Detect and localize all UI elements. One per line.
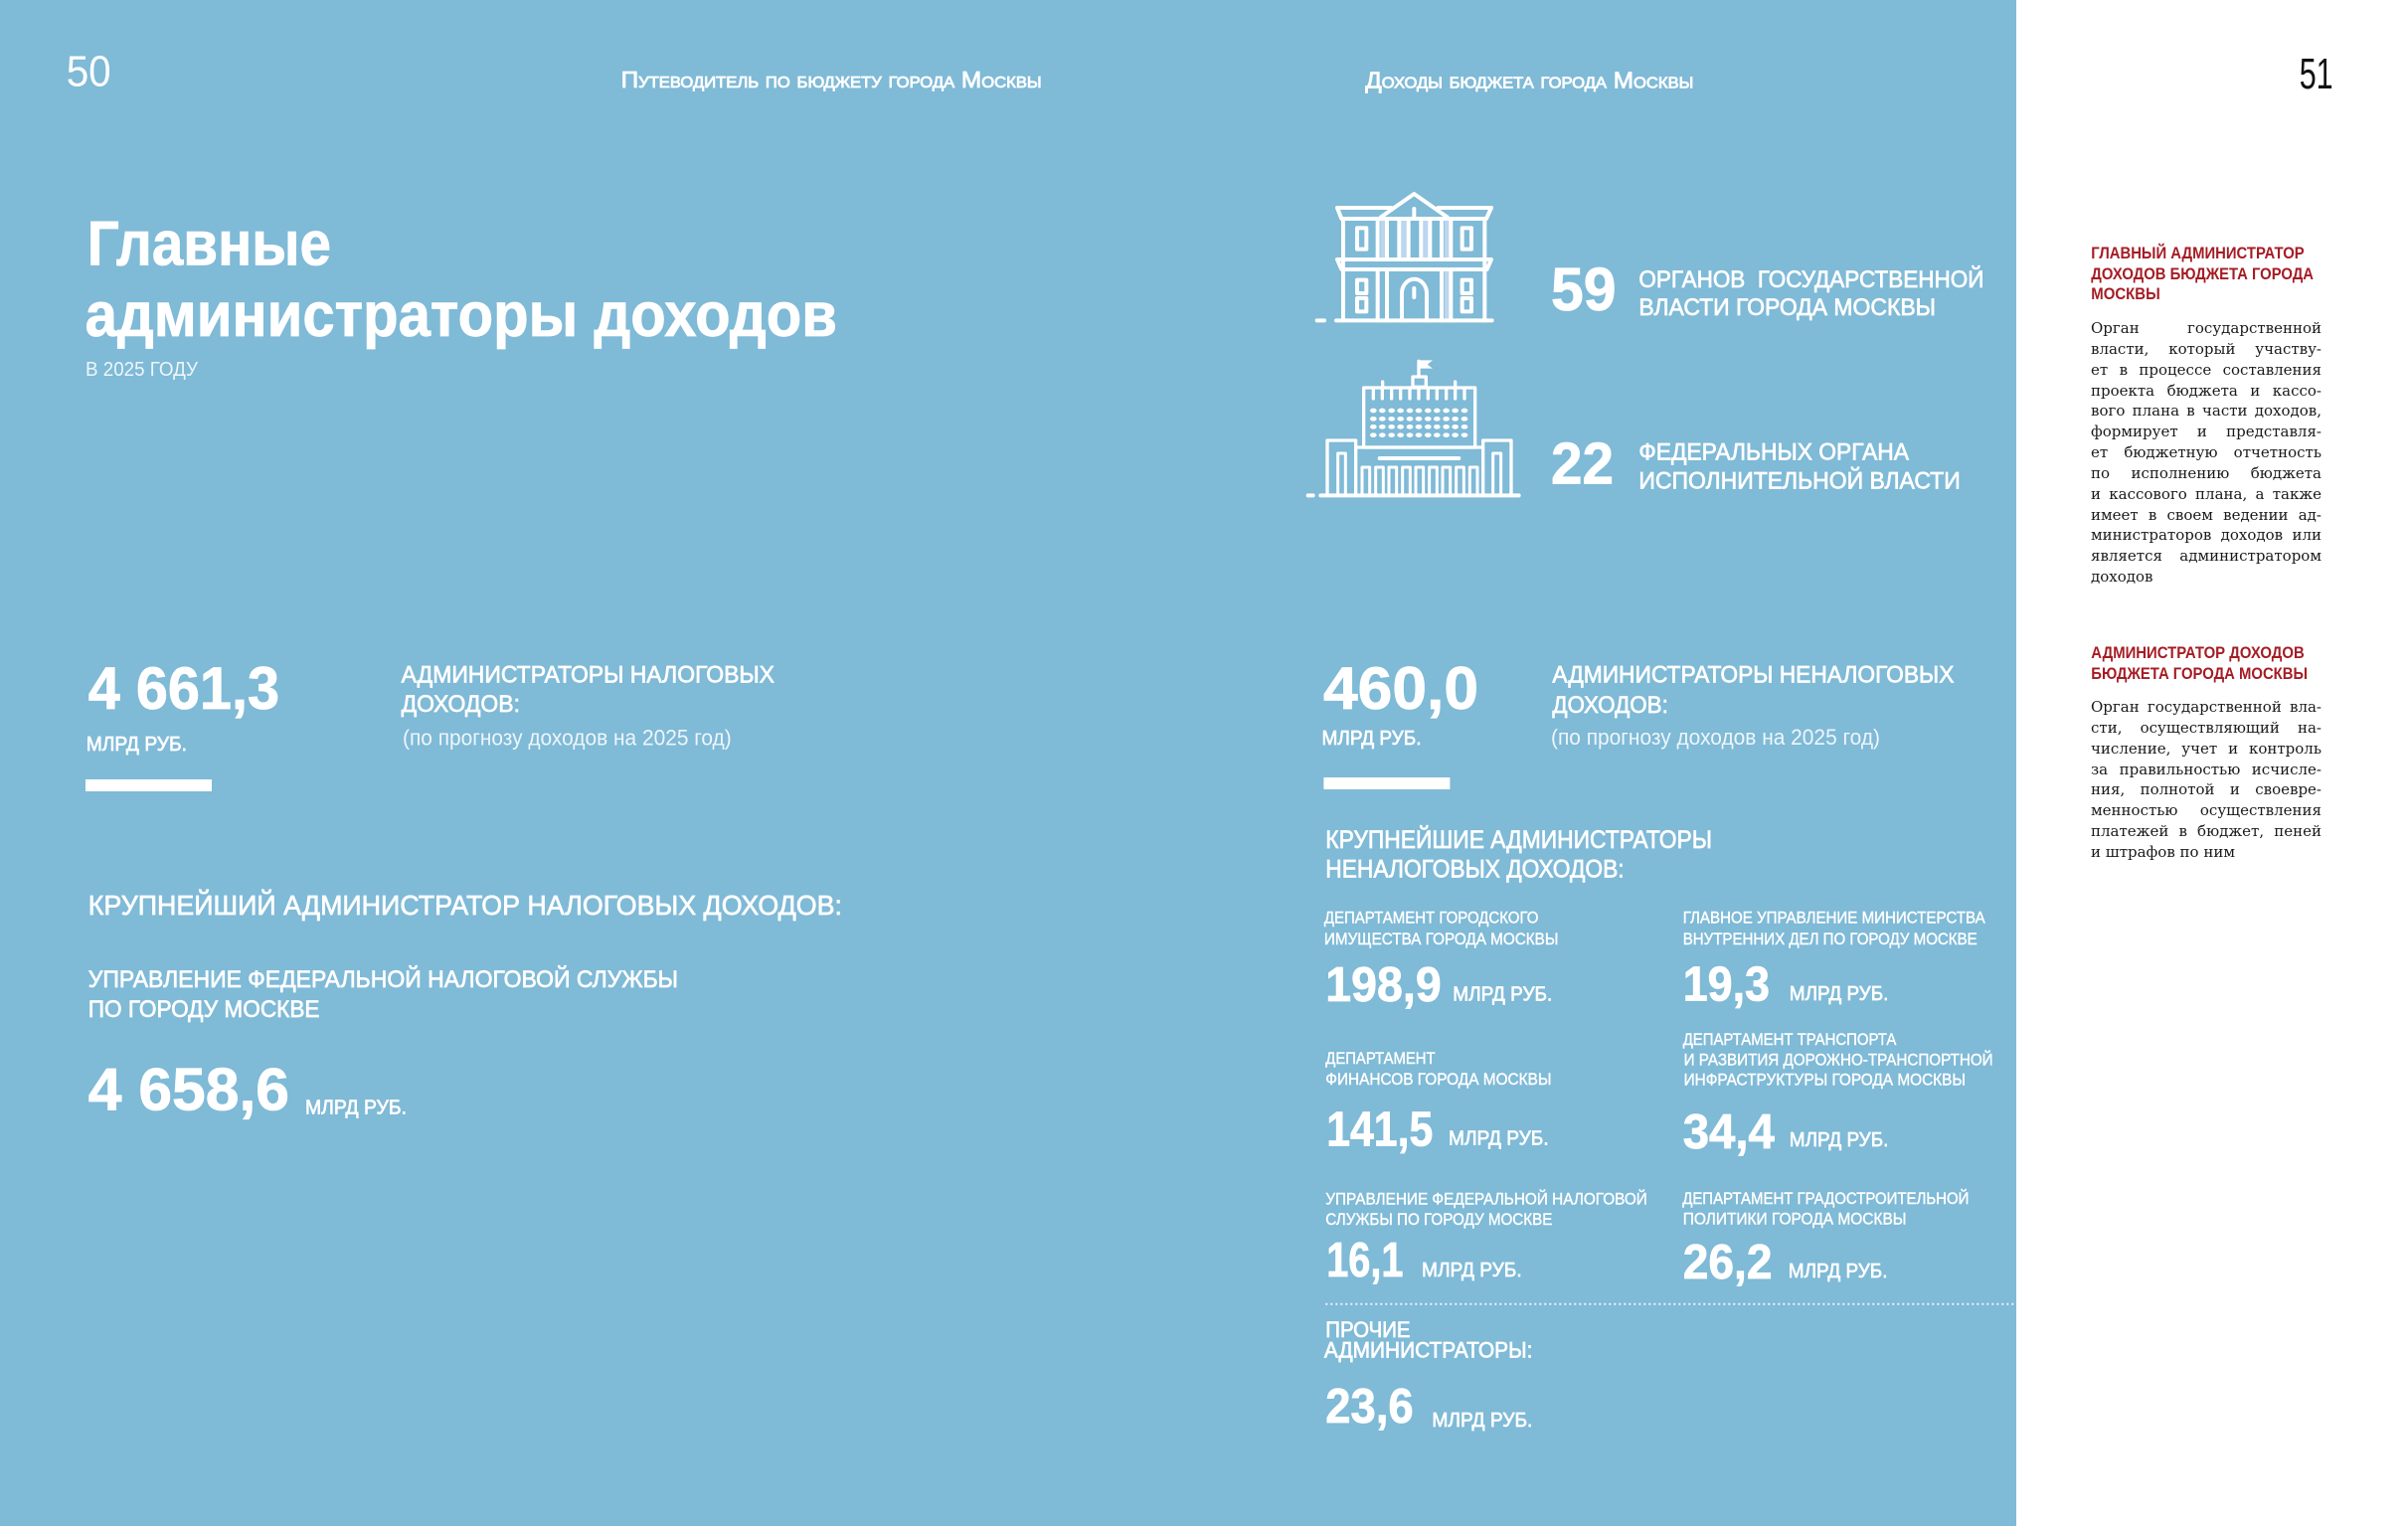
sidebar heading: administrator: БЮДЖЕТА ГОРОДА МОСКВЫ bbox=[2091, 665, 2308, 683]
item: transport department: И РАЗВИТИЯ ДОРОЖНО-ТРАНСПОРТНОЙ bbox=[1684, 1051, 1993, 1070]
item: federal tax service: 16,1 bbox=[1326, 1234, 1404, 1287]
item: finance department: ДЕПАРТАМЕНТ bbox=[1325, 1050, 1436, 1068]
subtitle: year: В 2025 ГОДУ bbox=[86, 359, 198, 381]
item: transport department: ДЕПАРТАМЕНТ ТРАНСПОРТА bbox=[1683, 1031, 1896, 1049]
page number 50: 50 bbox=[67, 48, 111, 96]
sidebar heading: chief administrator bbox=[2091, 244, 2314, 303]
heading: non-tax administrators bbox=[1551, 662, 1954, 750]
item: finance department bbox=[1325, 1050, 1551, 1157]
title: Главные bbox=[87, 210, 331, 279]
item: other administrators: МЛРД РУБ. bbox=[1432, 1409, 1532, 1432]
running header: guide: Путеводитель по бюджету города Москвы bbox=[621, 67, 1042, 92]
value: federal tax service bbox=[88, 1057, 407, 1123]
sidebar text: chief administrator definition: Орган государственной bbox=[2091, 319, 2322, 337]
heading: largest tax administrator: КРУПНЕЙШИЙ АДМИНИСТРАТОР НАЛОГОВЫХ ДОХОДОВ: bbox=[88, 890, 842, 921]
heading: largest non-tax administrators: КРУПНЕЙШИЕ АДМИНИСТРАТОРЫ bbox=[1325, 824, 1712, 854]
sidebar text: chief administrator definition: ет в процессе составления bbox=[2091, 361, 2322, 379]
item: finance department: 141,5 bbox=[1326, 1103, 1433, 1157]
running header: section: Доходы бюджета города Москвы bbox=[1365, 67, 1693, 92]
stat: 59 bodies bbox=[1551, 255, 1983, 323]
text: federal tax service: ПО ГОРОДУ МОСКВЕ bbox=[88, 996, 320, 1023]
stat: 22 bodies: ИСПОЛНИТЕЛЬНОЙ ВЛАСТИ bbox=[1638, 467, 1961, 495]
item: urban planning department: МЛРД РУБ. bbox=[1789, 1260, 1887, 1282]
sidebar text: administrator definition: менностью осуществления bbox=[2091, 801, 2322, 819]
heading: largest non-tax administrators: НЕНАЛОГОВЫХ ДОХОДОВ: bbox=[1325, 856, 1625, 884]
value: federal tax service: 4 658,6 bbox=[88, 1057, 289, 1123]
sidebar text: chief administrator definition: вого плана в части доходов, bbox=[2091, 402, 2322, 420]
non-tax revenue total: МЛРД РУБ. bbox=[1322, 727, 1422, 750]
text: federal tax service bbox=[88, 965, 678, 1023]
sidebar heading: chief administrator: МОСКВЫ bbox=[2091, 285, 2160, 303]
heading: tax administrators: ДОХОДОВ: bbox=[402, 691, 520, 718]
sidebar heading: administrator: АДМИНИСТРАТОР ДОХОДОВ bbox=[2091, 644, 2305, 662]
item: finance department: МЛРД РУБ. bbox=[1449, 1127, 1549, 1150]
sidebar text: chief administrator definition bbox=[2091, 319, 2322, 586]
sidebar text: chief administrator definition: формирует и представля- bbox=[2091, 423, 2322, 440]
sidebar text: administrator definition: числение, учет и контроль bbox=[2091, 740, 2322, 758]
accent bar: tax bbox=[86, 779, 212, 791]
item: urban planning department: ПОЛИТИКИ ГОРОДА МОСКВЫ bbox=[1683, 1211, 1907, 1229]
tax revenue total: МЛРД РУБ. bbox=[86, 733, 187, 756]
sidebar heading: administrator bbox=[2091, 644, 2308, 683]
non-tax revenue total: 460,0 bbox=[1323, 655, 1478, 722]
sidebar text: administrator definition: Орган государственной вла- bbox=[2091, 698, 2322, 716]
tax revenue total bbox=[86, 655, 279, 756]
sidebar text: chief administrator definition: имеет в своем ведении ад- bbox=[2091, 506, 2322, 524]
heading: non-tax administrators: АДМИНИСТРАТОРЫ НЕНАЛОГОВЫХ bbox=[1552, 662, 1954, 689]
sidebar text: administrator definition: за правильностью исчисле- bbox=[2091, 761, 2322, 778]
item: urban planning department bbox=[1682, 1189, 1969, 1289]
stat: 59 bodies: ВЛАСТИ ГОРОДА МОСКВЫ bbox=[1638, 294, 1936, 321]
sidebar text: administrator definition: ния, полнотой и своевре- bbox=[2091, 780, 2322, 798]
item: urban planning department: ДЕПАРТАМЕНТ ГРАДОСТРОИТЕЛЬНОЙ bbox=[1682, 1189, 1969, 1208]
stat: 59 bodies: ОРГАНОВ ГОСУДАРСТВЕННОЙ bbox=[1638, 265, 1983, 293]
item: city property department: 198,9 bbox=[1325, 958, 1442, 1012]
title bbox=[86, 210, 837, 350]
stat: 22 bodies: ФЕДЕРАЛЬНЫХ ОРГАНА bbox=[1638, 439, 1909, 466]
sidebar text: administrator definition: сти, осуществляющий на- bbox=[2091, 719, 2322, 737]
item: federal tax service bbox=[1325, 1190, 1647, 1287]
item: urban planning department: 26,2 bbox=[1683, 1236, 1772, 1289]
sidebar text: chief administrator definition: ет бюджетную отчетность bbox=[2091, 443, 2322, 461]
stat: 22 bodies bbox=[1551, 431, 1961, 497]
item: other administrators: АДМИНИСТРАТОРЫ: bbox=[1324, 1338, 1532, 1363]
icon: Moscow government building bbox=[1317, 194, 1492, 320]
item: finance department: ФИНАНСОВ ГОРОДА МОСКВЫ bbox=[1325, 1071, 1551, 1089]
sidebar text: chief administrator definition: доходов bbox=[2091, 568, 2152, 586]
title: администраторы доходов bbox=[86, 280, 837, 350]
item: transport department: ИНФРАСТРУКТУРЫ ГОРОДА МОСКВЫ bbox=[1684, 1072, 1966, 1090]
item: city property department: ИМУЩЕСТВА ГОРОДА МОСКВЫ bbox=[1324, 931, 1558, 948]
sidebar text: administrator definition bbox=[2091, 698, 2322, 861]
non-tax revenue total bbox=[1322, 655, 1478, 750]
item: main directorate of internal affairs: ВНУТРЕННИХ ДЕЛ ПО ГОРОДУ МОСКВЕ bbox=[1683, 931, 1978, 948]
heading: tax administrators bbox=[402, 662, 774, 750]
text: federal tax service: УПРАВЛЕНИЕ ФЕДЕРАЛЬНОЙ НАЛОГОВОЙ СЛУЖБЫ bbox=[88, 965, 678, 993]
item: city property department: ДЕПАРТАМЕНТ ГОРОДСКОГО bbox=[1324, 910, 1539, 928]
page number 51: 51 bbox=[2300, 50, 2333, 98]
heading: non-tax administrators: (по прогнозу доходов на 2025 год) bbox=[1551, 725, 1880, 750]
sidebar text: chief administrator definition: и кассового плана, а также bbox=[2091, 485, 2322, 503]
sidebar heading: chief administrator: ДОХОДОВ БЮДЖЕТА ГОРОДА bbox=[2091, 265, 2314, 283]
item: city property department bbox=[1324, 910, 1558, 1012]
sidebar text: administrator definition: платежей в бюджет, пеней bbox=[2091, 822, 2322, 840]
value: federal tax service: МЛРД РУБ. bbox=[305, 1097, 407, 1119]
item: federal tax service: МЛРД РУБ. bbox=[1422, 1259, 1522, 1281]
accent bar: non-tax bbox=[1323, 777, 1450, 789]
item: federal tax service: УПРАВЛЕНИЕ ФЕДЕРАЛЬНОЙ НАЛОГОВОЙ bbox=[1325, 1190, 1647, 1209]
tax revenue total: 4 661,3 bbox=[88, 655, 279, 722]
heading: largest non-tax administrators bbox=[1325, 824, 1712, 884]
sidebar heading: chief administrator: ГЛАВНЫЙ АДМИНИСТРАТОР bbox=[2091, 244, 2305, 262]
icon: federal government building bbox=[1308, 360, 1519, 495]
item: main directorate of internal affairs: ГЛАВНОЕ УПРАВЛЕНИЕ МИНИСТЕРСТВА bbox=[1683, 910, 1985, 928]
stat: 59 bodies: 59 bbox=[1551, 255, 1617, 323]
sidebar text: administrator definition: и штрафов по ним bbox=[2091, 843, 2235, 861]
sidebar text: chief administrator definition: по исполнению бюджета bbox=[2091, 464, 2322, 482]
item: city property department: МЛРД РУБ. bbox=[1453, 983, 1552, 1006]
item: transport department: МЛРД РУБ. bbox=[1790, 1128, 1888, 1151]
item: transport department: 34,4 bbox=[1683, 1105, 1775, 1159]
sidebar text: chief administrator definition: является администратором bbox=[2091, 547, 2322, 565]
heading: tax administrators: АДМИНИСТРАТОРЫ НАЛОГОВЫХ bbox=[402, 662, 774, 689]
item: transport department bbox=[1683, 1031, 1993, 1159]
item: other administrators: ПРОЧИЕ bbox=[1325, 1317, 1410, 1342]
sidebar text: chief administrator definition: министраторов доходов или bbox=[2091, 526, 2322, 544]
sidebar text: chief administrator definition: власти, который участву- bbox=[2091, 340, 2322, 358]
sidebar text: chief administrator definition: проекта бюджета и кассо- bbox=[2091, 382, 2322, 400]
item: other administrators bbox=[1324, 1317, 1532, 1434]
heading: non-tax administrators: ДОХОДОВ: bbox=[1552, 692, 1668, 719]
heading: tax administrators: (по прогнозу доходов на 2025 год) bbox=[403, 725, 732, 750]
item: main directorate of internal affairs: МЛРД РУБ. bbox=[1790, 982, 1888, 1005]
item: main directorate of internal affairs: 19,3 bbox=[1683, 958, 1770, 1012]
item: other administrators: 23,6 bbox=[1325, 1380, 1414, 1434]
item: federal tax service: СЛУЖБЫ ПО ГОРОДУ МОСКВЕ bbox=[1325, 1211, 1552, 1229]
stat: 22 bodies: 22 bbox=[1551, 431, 1614, 497]
item: main directorate of internal affairs bbox=[1683, 910, 1985, 1012]
